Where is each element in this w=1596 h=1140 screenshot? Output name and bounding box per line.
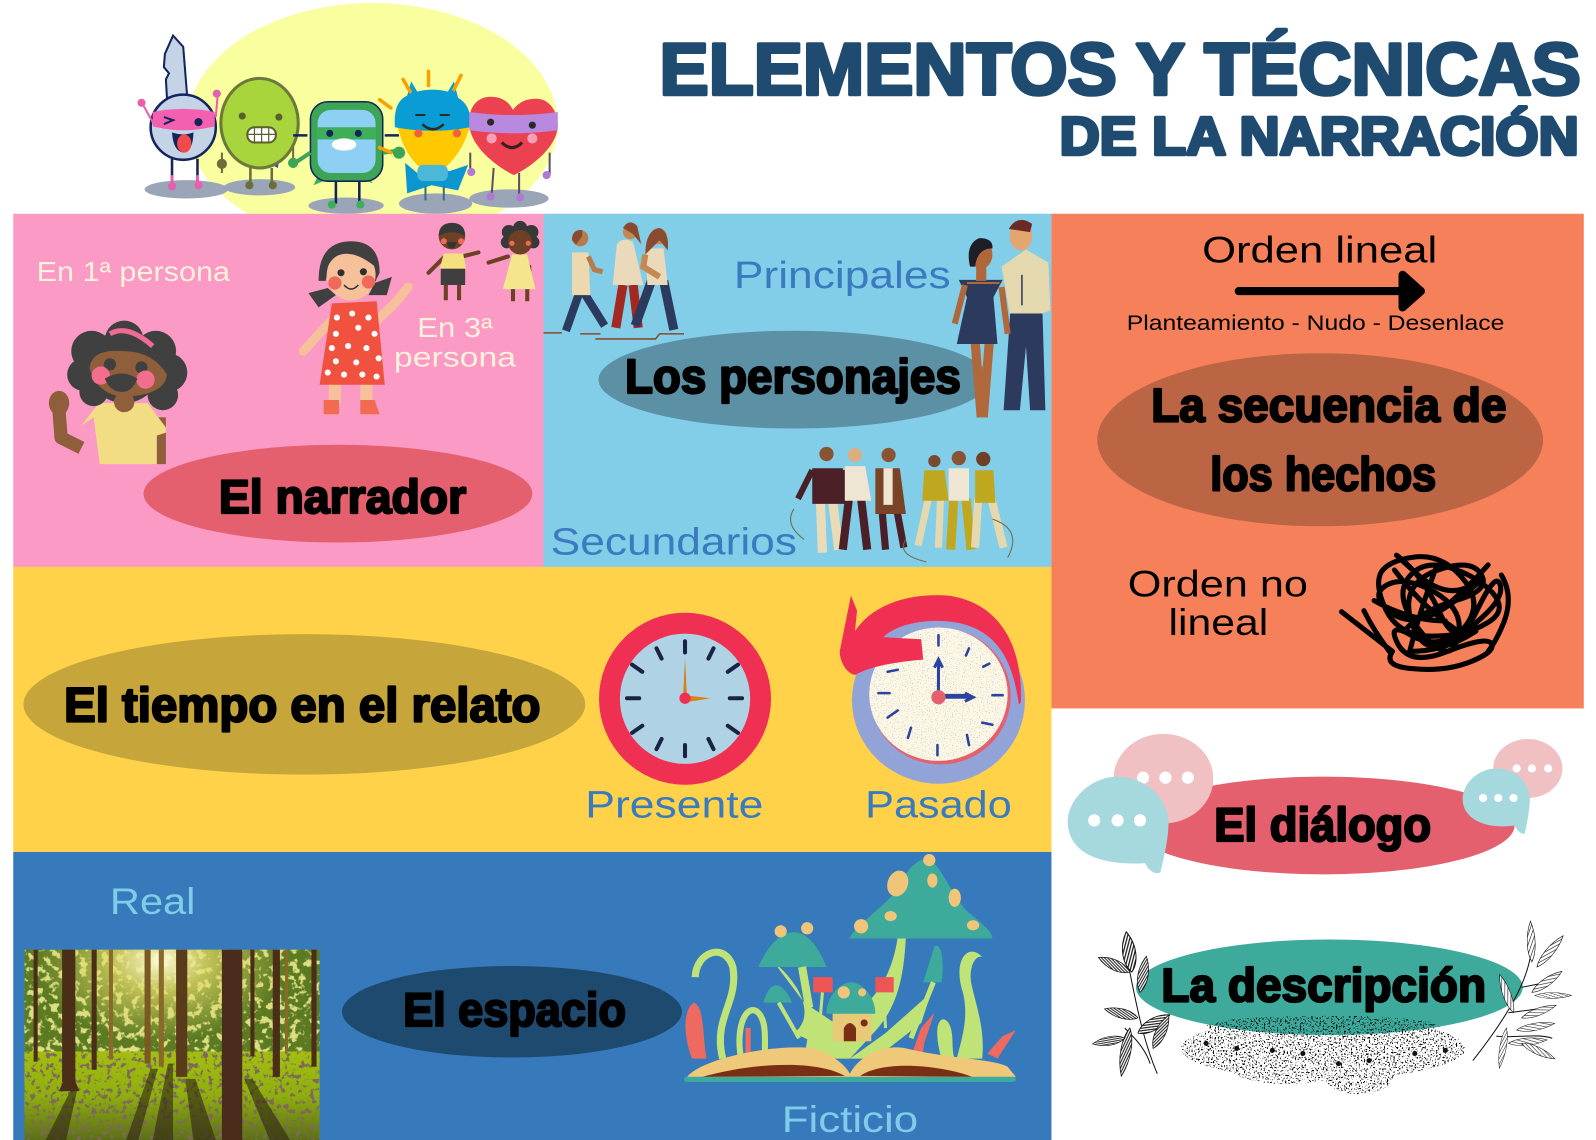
panel: El narrador	[13, 214, 544, 567]
label: En 1ª persona: En 1ª persona	[37, 256, 231, 287]
panel: El tiempo en el relato	[13, 567, 1051, 852]
illustration: girl with curly hair	[49, 321, 187, 464]
illustration: three walking people	[544, 222, 684, 339]
panel: El diálogo	[1068, 734, 1562, 874]
ellipse label: El espacio	[342, 966, 682, 1058]
illustration: superhero characters	[137, 3, 558, 245]
title line 1: ELEMENTOS Y TÉCNICAS	[660, 29, 1581, 111]
decoration: left leaves	[1092, 931, 1173, 1077]
arrow: backwards in time	[840, 595, 1021, 704]
ellipse label: El tiempo en el relato	[23, 634, 585, 775]
icon: speech bubble pink left	[1114, 734, 1213, 823]
label: Orden lineal: Orden lineal	[1202, 230, 1437, 271]
character: light bulb bat	[380, 71, 471, 201]
ellipse label: La descripción: La descripción	[1161, 960, 1486, 1012]
illustration: girl in red dress	[303, 241, 408, 414]
character: robot	[288, 102, 405, 209]
panel: La descripción	[1092, 921, 1572, 1094]
icon: speech bubble teal left	[1068, 777, 1168, 873]
label: Ficticio: Ficticio	[782, 1099, 918, 1140]
scribble: non-linear order	[1342, 555, 1508, 669]
title line 2: DE LA NARRACIÓN	[1060, 107, 1579, 167]
ellipse label: El diálogo: El diálogo	[1214, 799, 1431, 851]
ellipse label: El narrador	[144, 445, 532, 543]
label: En 3ª persona: persona	[394, 341, 517, 372]
label: Secundarios: Secundarios	[551, 521, 797, 563]
illustration: fantasy book with mushrooms	[684, 854, 1016, 1082]
title	[660, 29, 1581, 167]
label: Pasado: Pasado	[865, 783, 1012, 825]
icon: present clock	[599, 613, 771, 785]
arrow: linear order	[1239, 275, 1421, 307]
label: Orden no lineal: lineal	[1168, 602, 1268, 643]
ellipse label: El diálogo	[1132, 777, 1515, 874]
label: plot stages: Planteamiento - Nudo - Desenlace	[1127, 311, 1504, 335]
character: key	[137, 36, 221, 190]
character: heart	[467, 97, 558, 202]
ellipse label: La descripción	[1136, 939, 1523, 1035]
icon: speech bubble teal right	[1463, 768, 1530, 834]
label: Orden no lineal: Orden no	[1128, 563, 1308, 604]
illustration: two small children	[429, 221, 539, 301]
label: Presente: Presente	[585, 783, 763, 825]
ellipse label: La secuencia de los hechos: los hechos	[1210, 449, 1436, 501]
ellipse label: La secuencia de los hechos	[1097, 353, 1543, 526]
icon: past clock	[840, 595, 1025, 784]
panel: El espacio	[13, 852, 1051, 1140]
label: Real: Real	[110, 881, 195, 922]
label: En 3ª persona	[394, 312, 517, 372]
photo: sunlit forest	[24, 950, 320, 1140]
label: En 3ª persona: En 3ª	[417, 312, 494, 343]
label: Principales: Principales	[734, 254, 951, 296]
ellipse label: El narrador: El narrador	[219, 471, 466, 523]
illustration: couple	[955, 220, 1050, 417]
ellipse label: Los personajes: Los personajes	[625, 351, 961, 404]
character: green monster	[217, 77, 298, 189]
ellipse label: El espacio: El espacio	[403, 984, 626, 1036]
panel: La secuencia de los hechos	[1051, 214, 1584, 708]
label: Orden no lineal	[1128, 563, 1308, 643]
ellipse label: El tiempo en el relato: El tiempo en el relato	[64, 680, 540, 733]
ellipse label: Los personajes	[598, 331, 989, 429]
decoration: right leaves	[1473, 921, 1572, 1069]
illustration: group of six people	[791, 447, 1013, 562]
shadows under characters	[145, 179, 549, 214]
panel: Los personajes	[544, 214, 1051, 567]
decoration: stipple flowers	[1181, 1016, 1466, 1094]
ellipse label: La secuencia de los hechos: La secuencia de	[1151, 379, 1506, 431]
icon: speech bubble pink right	[1493, 739, 1562, 798]
